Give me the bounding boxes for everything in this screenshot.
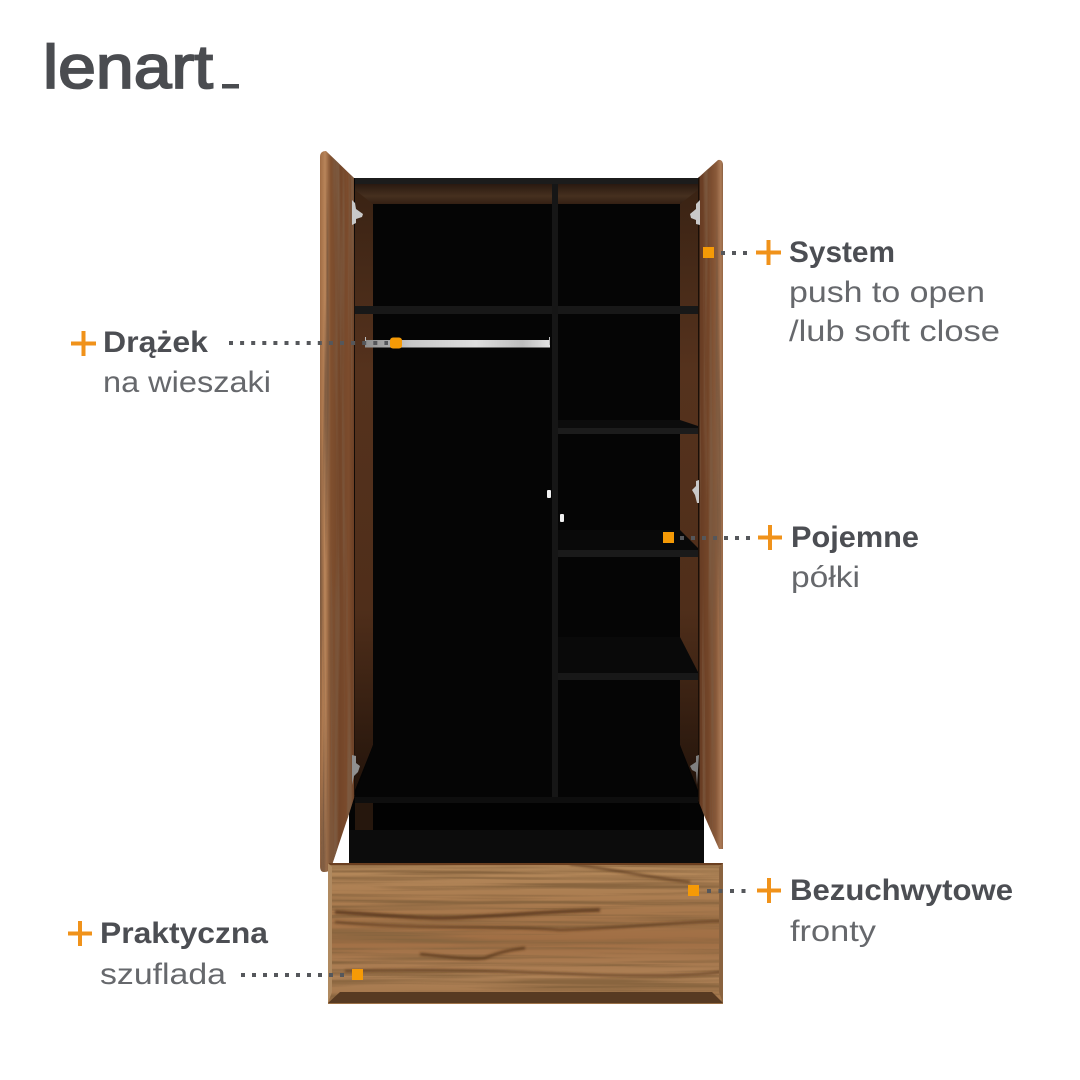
hinges bbox=[352, 200, 700, 785]
callout: System push to open: /lub soft close bbox=[789, 315, 1000, 348]
callout: System push to open: push to open bbox=[789, 276, 985, 309]
callout: Bezuchwytowe fronty bbox=[688, 874, 1013, 948]
callout: Pojemne półki: półki bbox=[791, 561, 860, 594]
centre divider bbox=[552, 184, 558, 797]
callout: System push to open: System bbox=[789, 236, 895, 269]
right door bbox=[698, 158, 724, 852]
callout: Drążek na wieszaki: na wieszaki bbox=[103, 366, 271, 399]
callout: Praktyczna szuflada: szuflada bbox=[100, 958, 226, 991]
callout: System push to open bbox=[703, 236, 1000, 348]
logo: lenart: lenart bbox=[43, 33, 213, 101]
callout: Praktyczna szuflada bbox=[68, 917, 363, 991]
callout: Bezuchwytowe fronty: fronty bbox=[790, 915, 876, 948]
wardrobe bbox=[320, 150, 724, 1004]
left door bbox=[320, 150, 356, 874]
shelves bbox=[349, 306, 704, 863]
callout: Drążek na wieszaki bbox=[71, 326, 402, 399]
callout: Bezuchwytowe fronty: Bezuchwytowe bbox=[790, 874, 1013, 907]
hanging rail bbox=[365, 337, 550, 348]
callout: Pojemne półki: Pojemne bbox=[791, 521, 919, 554]
callout: Pojemne półki bbox=[663, 521, 919, 594]
callout: Drążek na wieszaki: Drążek bbox=[103, 326, 208, 359]
drawer front bbox=[328, 863, 723, 1004]
shelf pegs bbox=[547, 490, 564, 522]
wardrobe body interior bbox=[349, 178, 704, 863]
callout: Praktyczna szuflada: Praktyczna bbox=[100, 917, 268, 950]
infographic canvas bbox=[46, 42, 1012, 1004]
